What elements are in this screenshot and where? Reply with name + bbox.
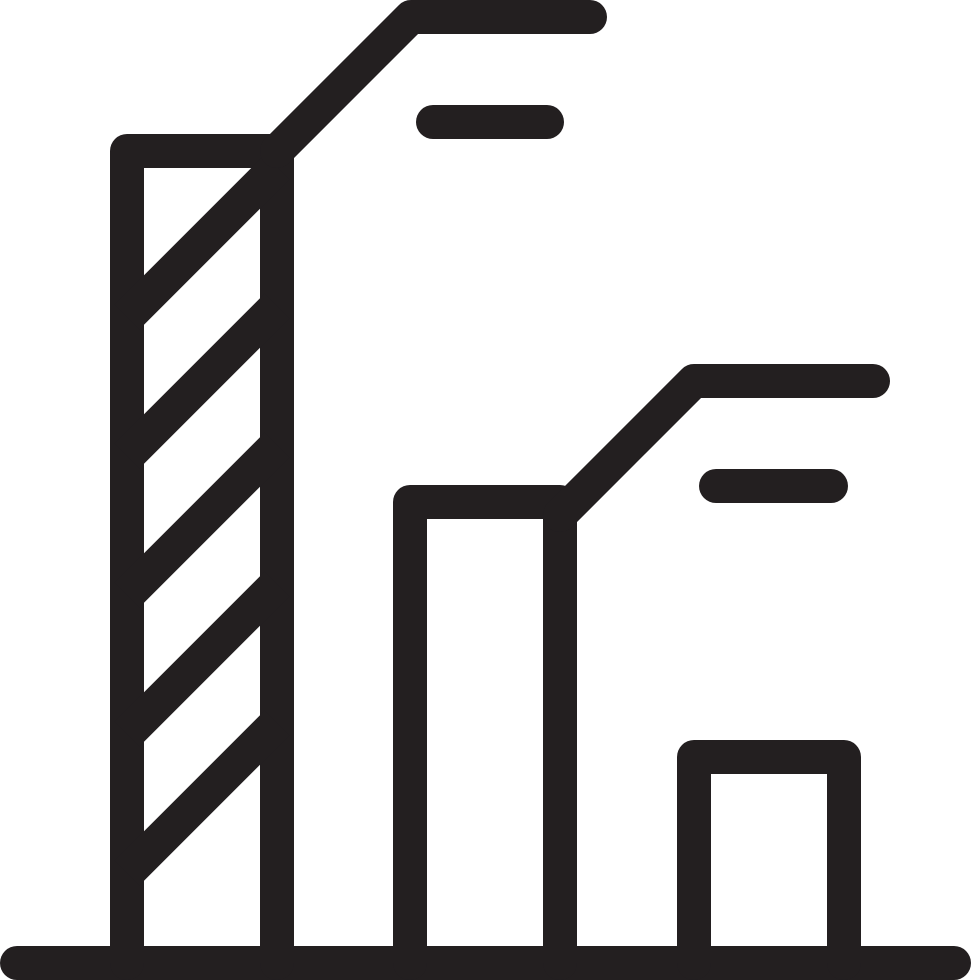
tall bar callout dash xyxy=(433,105,547,139)
tall striped bar xyxy=(127,151,277,963)
tall bar callout leader xyxy=(277,17,590,151)
medium bar callout dash xyxy=(716,469,831,503)
short bar xyxy=(694,757,844,963)
medium bar xyxy=(410,502,560,963)
baseline xyxy=(17,946,954,980)
medium bar callout leader xyxy=(560,381,873,515)
